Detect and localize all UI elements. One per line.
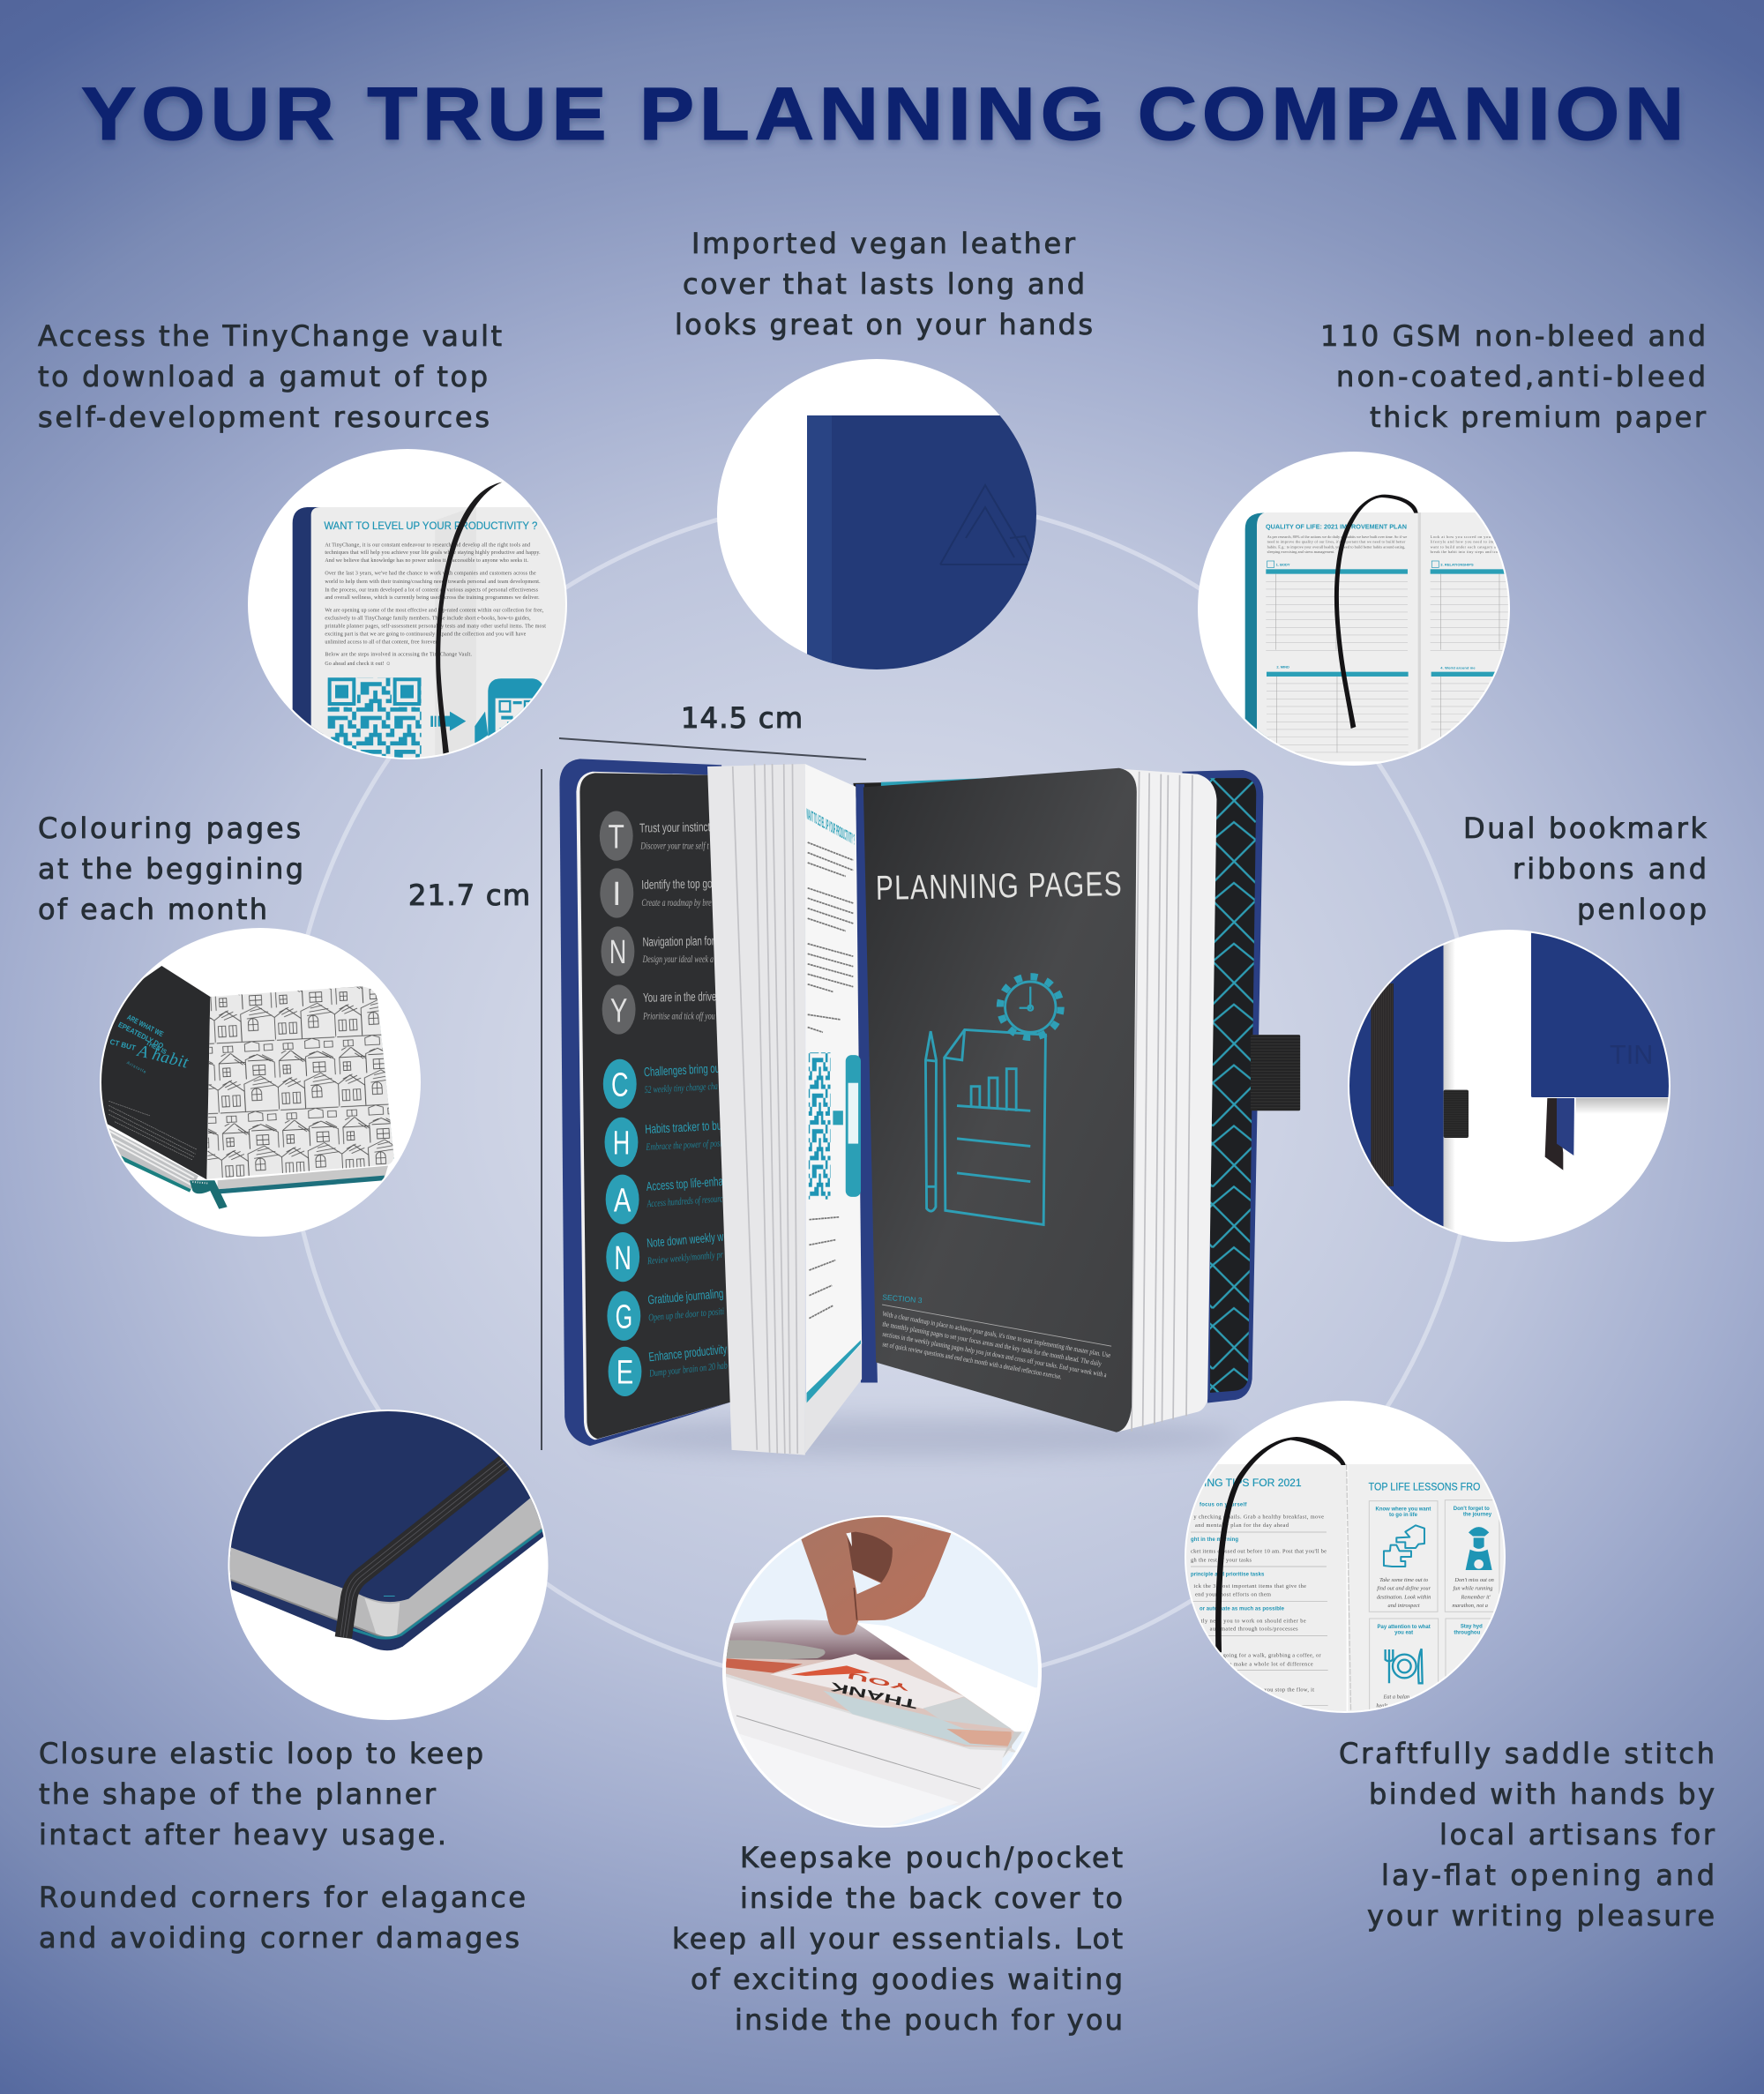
card text [829,1670,918,1712]
card text: THANK [829,1679,918,1712]
TINY CHANGE index: G [616,1299,632,1336]
body copy: unlimited access to all of that content, free forever. [325,639,438,645]
circle: saddle stitch binding: automated through tools/processes [1210,1627,1298,1633]
intro copy: Look at how you scored on your activity [1431,535,1509,539]
planner tables: 2. MIND [1276,665,1289,669]
ribbon [190,1180,228,1209]
section text [882,1292,1111,1380]
body copy: In the process, our team developed a lot of content on various aspects of personal effectiveness [325,587,539,593]
intro copy: need to improve the quality of our lives, it's important that we need to build better [1267,539,1406,544]
ribbons [1545,1098,1574,1170]
circle: saddle stitch binding: you stop the flow, it [1264,1687,1314,1694]
intro copy: habits. E.g.: to improve your overall health, you need to build better habits around eating, [1267,544,1405,550]
section text: sections in the weekly planning pages help you jot down and cross off your tasks. End your week with a [882,1330,1108,1379]
text block: colouring pages [38,811,303,926]
circle: keepsake pouch [706,1499,1058,1852]
circle: colouring pages: CT BUT [108,1037,137,1052]
body copy: We are opening up some of the most effective and top-rated content within our collection for free, [325,608,544,614]
body copy: At TinyChange, it is our constant endeavour to research and develop all the right tools and [325,542,530,548]
circle: saddle stitch binding: fun while running [1453,1586,1492,1592]
section text: the monthly planning pages to set your focus areas and the key tasks for the month ahead. The daily [882,1320,1102,1368]
text block: colouring pages: of each month [38,893,267,926]
text block: elastic loop and rounded corners: and avoiding corner damages [39,1921,519,1955]
text block: elastic loop and rounded corners: intact after heavy usage. [39,1818,446,1851]
index descriptions: Enhance productivity [648,1342,728,1365]
circle: colouring pages: Aristotle [126,1060,147,1074]
embossed brand: TIN [1610,1040,1653,1070]
circle: bookmark ribbons and pen loop [1341,917,1684,1253]
left page tips: focus on yourself [1200,1503,1246,1508]
planner tables [1266,561,1507,677]
text block: saddle stitch: lay-flat opening and [1381,1858,1715,1892]
text block: saddle stitch: your writing pleasure [1367,1899,1715,1933]
text block: saddle stitch: Craftfully saddle stitch [1339,1737,1715,1770]
index descriptions: Open up the door to positi [648,1306,724,1323]
text block: vegan leather cover: cover that lasts long and [683,267,1085,301]
text block: keepsake pouch [672,1841,1123,2037]
circle: saddle stitch binding: the journey [1463,1512,1492,1517]
text block: vegan leather cover: Imported vegan leather [691,227,1076,260]
back cover with lattice and pen loop [1182,770,1300,1402]
left inside cover [559,759,732,1446]
circle: saddle stitch binding: cket items crossed out before 10 am. Post that you'll be [1191,1549,1327,1555]
circle: colouring pages: ARE WHAT WE [125,1013,165,1038]
text block: bookmark ribbons: Dual bookmark [1463,811,1707,845]
circle: saddle stitch binding: Don't forget to [1454,1507,1490,1512]
turning page: vault [805,764,862,1454]
left pages [109,1128,198,1189]
ribbon [1334,495,1418,729]
planner tables: 4. World around me [1440,665,1476,669]
central open planner [559,759,1300,1462]
icon: phone [475,678,542,743]
section text: set of quick review questions and end each month with a detailed reflection exercise. [882,1340,1063,1380]
circle: saddle stitch binding: Pay attention to what [1378,1625,1431,1630]
central open planner: WANT TO LEVEL UP YOUR PRODUCTIVITY ? [807,804,855,849]
body copy: world to help them with their training/coaching needs towards personal and team development. [325,580,541,585]
circle: premium paper spread [1198,452,1535,766]
icon: framing hands [1384,1525,1424,1567]
icon: embossed logo [940,485,1045,565]
body copy [325,542,546,667]
text block: elastic loop and rounded corners: Closure elastic loop to keep [39,1737,483,1770]
feature circles [100,359,1671,1828]
index descriptions: Design your ideal week a [642,954,714,965]
text block: elastic loop and rounded corners: Rounded corners for elagance [39,1881,526,1914]
right page stack [1117,769,1216,1432]
lesson cards [1369,1500,1500,1718]
intro copy [1267,535,1509,554]
index descriptions: Dump your brain on 20 hab [648,1360,729,1380]
right page heading: TOP LIFE LESSONS FRO [1369,1480,1480,1492]
index descriptions [639,820,729,1380]
text block: TinyChange vault [38,319,502,434]
heading: WANT TO LEVEL UP YOUR PRODUCTIVITY ? [324,520,538,532]
text block: colouring pages: Colouring pages [38,811,301,845]
circle: saddle stitch binding: marathon, not a [1452,1603,1488,1609]
icon: document, gear clock and pencil [925,976,1061,1224]
text block: bookmark ribbons: ribbons and [1513,852,1707,886]
dimension: height 21.7 cm: 21.7 cm [408,879,530,912]
index descriptions: Embrace the power of posi [645,1139,722,1153]
text block: premium paper: 110 GSM non-bleed and [1320,319,1706,353]
text block: keepsake pouch: of exciting goodies waiting [691,1963,1123,1996]
TINY CHANGE index: T [609,819,624,856]
text block: TinyChange vault: Access the TinyChange vault [38,319,502,353]
index descriptions: Discover your true self t [640,841,709,852]
left page tips [1191,1503,1285,1612]
left page tips: or automate as much as possible [1200,1607,1285,1612]
TINY CHANGE index: N [609,934,626,971]
text block: elastic loop and rounded corners: the shape of the planner [39,1777,437,1811]
circle: saddle stitch binding: end your most efforts on them [1195,1591,1271,1597]
circle: colouring pages: A habit [134,1042,191,1073]
TINY CHANGE index: C [611,1067,628,1104]
circle: colouring pages [88,928,421,1237]
text block: saddle stitch: binded with hands by [1369,1777,1715,1811]
white flap [856,1622,1058,1731]
section text: With a clear roadmap in place to achieve your goals, it's time to start implementing the master plan. Use [882,1310,1111,1359]
text block: TinyChange vault: self-development resources [38,400,490,434]
TINY CHANGE index: E [617,1355,633,1392]
right page: planning pages [863,768,1137,1432]
pocket front [723,1676,1012,1806]
card text: YOU [847,1670,910,1692]
icon: plate and cutlery [1386,1649,1423,1683]
index descriptions: Prioritise and tick off you [642,1011,715,1021]
circle: saddle stitch binding: healt [1376,1702,1387,1709]
hand [801,1517,951,1635]
index descriptions: Access top life-enha [646,1175,723,1194]
body copy: exciting part is that we are going to continuously expand the collection and you will have [325,632,527,638]
dimension: width 14.5 cm: 14.5 cm [681,701,803,735]
text block: saddle stitch: local artisans for [1439,1818,1715,1851]
circle: saddle stitch binding: ick the 3 most important items that give the [1193,1583,1306,1589]
body copy: and overall wellness, which is currently being used across the training programmes we deliver. [325,595,540,601]
text block: vegan leather cover: looks great on your hands [675,308,1093,341]
intro copy: sleeping exercising and stress management. [1267,550,1334,554]
text block: keepsake pouch: keep all your essentials. Lot [672,1922,1123,1956]
right page: planning pages: PLANNING PAGES [876,865,1123,908]
text block: premium paper [1320,319,1707,434]
body copy: Below are the steps involved in accessing the TinyChange Vault. [325,653,472,658]
card stack [723,1658,1014,1749]
circle: saddle stitch binding: destination. Look within [1377,1594,1431,1600]
circle: saddle stitch binding: tly need you to work on should either be [1201,1618,1306,1624]
index descriptions: Identify the top go [641,877,713,893]
circle: saddle stitch binding: Don't miss out on [1454,1577,1494,1583]
icon: adventurer [1466,1527,1492,1570]
colouring page [207,986,394,1179]
circle: saddle stitch binding: y checking emails. Grab a healthy breakfast, move [1193,1514,1324,1521]
heading: QUALITY OF LIFE: 2021 IMPROVEMENT PLAN [1266,522,1407,530]
text block: colouring pages: at the beggining [38,852,303,886]
text block: keepsake pouch: inside the pouch for you [735,2003,1123,2037]
circle: TinyChange vault page [248,449,567,759]
index descriptions: You are in the drive [643,990,716,1006]
circle: saddle stitch binding: n make a whole lot of difference [1229,1661,1313,1667]
index descriptions: 52 weekly tiny change cha [644,1081,718,1096]
intro copy: As per research, 80% of the actions we do daily are habits we have built over time. So if we [1267,535,1407,540]
text block: keepsake pouch: inside the back cover to [740,1881,1123,1915]
planner tables: 3. RELATIONSHIPS [1440,562,1474,566]
circle: saddle stitch binding: Remember it' [1461,1594,1491,1600]
left page tips: principle and prioritise tasks [1191,1572,1265,1577]
page edge and cover [218,1166,388,1189]
elastic band [340,1460,507,1638]
pocket back [723,1619,917,1664]
body copy: And we believe that knowledge has no power unless it is accessible to anyone who seeks it. [325,558,528,564]
index descriptions: Navigation plan for [642,934,714,950]
text block: vegan leather cover [675,227,1093,341]
text block: bookmark ribbons: penloop [1577,893,1707,926]
circle: saddle stitch binding: throughou [1454,1631,1481,1636]
index descriptions: Challenges bring ou [644,1062,721,1080]
TINY CHANGE index [600,811,641,1396]
dimension: width 14.5 cm [559,701,866,759]
circle: elastic closure and corner [220,1402,553,1720]
circle: saddle stitch binding [1173,1401,1524,1718]
left page heading: ING TIPS FOR 2021 [1204,1477,1302,1489]
intro copy: break the habit into tiny steps and track the [1431,550,1508,554]
circle: saddle stitch binding: Know where you want [1376,1507,1431,1513]
text block: keepsake pouch: Keepsake pouch/pocket [740,1841,1123,1874]
circle: saddle stitch binding: and mentally plan for the day ahead [1195,1522,1289,1529]
index descriptions: Create a roadmap by bre [641,898,712,909]
left page tips: ght in the morning [1191,1537,1238,1543]
text block: bookmark ribbons [1463,811,1707,926]
index descriptions: Access hundreds of resourc [646,1193,723,1209]
circle: saddle stitch binding: Eat a balan [1383,1694,1409,1701]
circle: saddle stitch binding: going for a walk, grabbing a coffee, or [1223,1652,1322,1658]
TINY CHANGE index: H [613,1126,630,1163]
circle: saddle stitch binding: gh the rest of your tasks [1191,1557,1252,1563]
circle: saddle stitch binding: to go in life [1389,1513,1418,1518]
text block: saddle stitch [1339,1737,1715,1933]
icon: QR code [328,677,422,760]
spine and right page shadow [853,778,1035,1383]
TINY CHANGE index: N [614,1240,632,1277]
TINY CHANGE index: I [612,876,622,913]
body copy: Go ahead and check it out! ☺ [325,662,391,667]
planner tables: 1. BODY [1276,562,1290,566]
section text: SECTION 3 [882,1292,923,1305]
intro copy: want to build under each category and add [1431,544,1509,549]
index descriptions: Gratitude journaling [647,1287,724,1308]
TINY CHANGE index: Y [610,992,627,1029]
body copy: printable planner pages, self-assessment personality tests and many other useful items. The most [325,624,546,630]
circle: saddle stitch binding: find out and define your [1377,1586,1431,1592]
text block: premium paper: non-coated,anti-bleed [1336,360,1706,393]
TINY CHANGE index: A [614,1182,632,1219]
dark quote page [101,966,210,1180]
body copy: Over the last 3 years, we've had the chance to work with companies and customers across the [325,572,536,577]
index descriptions: Review weekly/monthly pr [647,1250,724,1267]
text block: premium paper: thick premium paper [1370,400,1707,434]
title: YOUR TRUE PLANNING COMPANION [81,72,1689,155]
index descriptions: Trust your instinct [639,820,711,836]
icon: arrow [430,712,466,731]
text block: TinyChange vault: to download a gamut of top [38,360,488,393]
body copy: techniques that will help you achieve your life goals while staying highly productive and happy. [325,550,541,556]
circle: saddle stitch binding: Stay hyd [1461,1624,1483,1629]
circle: saddle stitch binding: Take some time out to [1379,1577,1428,1583]
circle: saddle stitch binding: you eat [1394,1631,1413,1636]
index descriptions: Habits tracker to bu [645,1119,722,1137]
circle: colouring pages: EPEATEDLY DO. [116,1020,167,1051]
turning page stack [707,764,805,1455]
index descriptions: Note down weekly w [647,1230,724,1251]
intro copy: lifestyle and how you need to improve it [1431,539,1509,543]
body copy: exclusively to all TinyChange family members. These include short e-books, how-to guides, [325,615,531,621]
text block: elastic loop and rounded corners [39,1737,526,1955]
circle: vegan leather cover [717,359,1045,680]
ribbon [1215,1437,1346,1652]
circle: colouring pages: THEN IS [145,1039,168,1056]
ribbon [436,482,502,756]
circle: saddle stitch binding: and introspect [1388,1603,1420,1609]
